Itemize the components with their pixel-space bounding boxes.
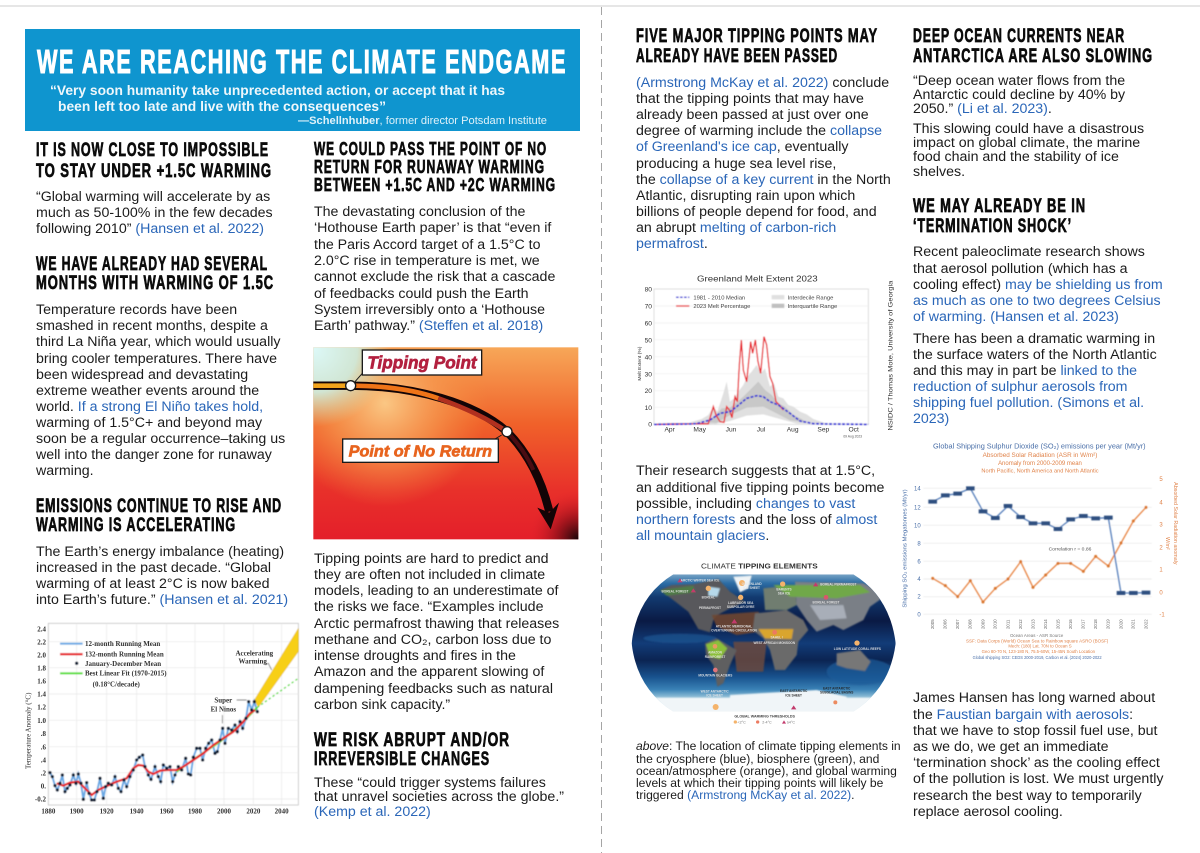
heading: WARMING IS ACCELERATING (36, 515, 236, 536)
heading: WE MAY ALREADY BE IN (913, 196, 1086, 217)
text block: of warming. (Hansen et al. 2023) (913, 309, 1119, 325)
title: WE ARE REACHING THE CLIMATE ENDGAME (37, 43, 567, 80)
x axis labels: 1940 (130, 807, 144, 815)
quote (50, 83, 505, 115)
right axis labels (1159, 477, 1165, 618)
y axis labels: 1.0 (37, 717, 47, 725)
text block: further tipping points: Their research suggests that at 1.5°C, (636, 463, 875, 479)
heading (636, 26, 878, 67)
text block: reduction of sulphur aerosols from (913, 379, 1128, 395)
text block: that the tipping points that may have (636, 91, 864, 107)
y axis labels: 1.8 (37, 664, 47, 672)
map markers (677, 578, 860, 710)
text block: 2.0°C rise in temperature is met, we (314, 253, 540, 269)
x axis labels: Apr (664, 427, 676, 434)
y axis labels: 60 (645, 320, 652, 327)
text block (314, 775, 564, 820)
text block: tipping points hard to predict: Tipping points are hard to predict and (314, 551, 549, 567)
legend: 1981 - 2010 Median (693, 295, 745, 301)
year labels: 2013 (1030, 619, 1035, 629)
text block: Faustian bargain: ‘termination shock’ as the cooling effect (913, 755, 1160, 771)
text block: billions of people depend for food, and (636, 204, 877, 220)
heading (36, 496, 282, 536)
chart title (933, 442, 1146, 474)
quote: been left too late and live with the consequences” (58, 99, 386, 115)
legend: (0.18°C/decade) (93, 681, 141, 689)
left axis labels (914, 486, 921, 618)
label: tipping point: Tipping Point (367, 353, 478, 373)
map labels: BARENTS (776, 587, 792, 591)
text block: tipping points hard to predict: the risks we face. “Examples include (314, 599, 544, 615)
correlation note: Correlation r = 0.86 (1049, 547, 1092, 553)
map labels: SAHEL / (770, 636, 783, 640)
left axis labels: 4 (917, 577, 921, 583)
chart: temperature anomaly line chart (25, 623, 298, 815)
legend: January-December Mean (85, 660, 161, 668)
chart: climate tipping elements map (630, 562, 897, 724)
x axis labels (41, 807, 289, 815)
panel: deep ocean currents (913, 26, 1153, 180)
y axis labels: 2.0 (37, 651, 47, 659)
text block: well into the danger zone for runaway (35, 447, 273, 463)
chart date stamp: 09 Aug 2023 (843, 434, 862, 438)
left axis labels: 6 (917, 559, 921, 565)
text block (913, 73, 1144, 180)
left axis labels: 0 (917, 612, 921, 618)
chart sources (966, 633, 1109, 660)
map labels: OVERTURNING CIRCULATION (711, 629, 758, 633)
legend: Interdecile Range (788, 295, 833, 301)
heading: IRREVERSIBLE CHANGES (314, 749, 490, 770)
panel: title banner (25, 29, 580, 131)
map labels: GREENLAND (742, 582, 762, 586)
chart sources: Geo 80-70 N, 123-180 N, 75.5-60W, 15-45N South Location (982, 649, 1095, 654)
legend: Interquartile Range (788, 304, 837, 310)
quote attribution: —Schellnhuber, former director Potsdam Institute (298, 115, 547, 127)
right axis title: W/m² (1164, 537, 1170, 550)
heading: TO STAY UNDER +1.5C WARMING (36, 161, 272, 182)
panel: abrupt changes (314, 730, 564, 820)
text block (35, 544, 288, 608)
year labels: 2021 (1131, 619, 1136, 629)
y axis labels: 80 (645, 287, 652, 294)
x axis labels: 2040 (275, 807, 289, 815)
chart sources: Global shipping SO2: CEDS 2000-2019, Carbon et al. (2024) 2020-2022 (973, 655, 1102, 660)
text block: There has been a dramatic warming in (913, 331, 1155, 347)
legend: 12-month Running Mean (85, 640, 160, 648)
right axis title (1164, 482, 1178, 565)
x axis labels: 1960 (160, 807, 174, 815)
x axis labels: May (693, 427, 707, 434)
year labels: 2016 (1068, 619, 1073, 629)
year labels: 2006 (943, 619, 948, 629)
y axis labels (35, 626, 47, 804)
text block: 2050.” (Li et al. 2023). (913, 101, 1052, 117)
left axis labels: 12 (914, 505, 921, 511)
year labels (930, 619, 1148, 629)
heading (913, 26, 1153, 67)
chart: tipping point diagram (313, 347, 578, 539)
text block: (Kemp et al. 2022) (314, 804, 431, 820)
text block: producing a huge sea level rise, (636, 156, 836, 172)
panel: emissions continue to rise (35, 496, 288, 608)
y axis labels: 70 (645, 303, 652, 310)
text block: smashed in recent months, despite a (36, 318, 268, 334)
text block: This slowing could have a disastrous (913, 121, 1144, 137)
text block: ‘Hothouse Earth paper’ is that “even if (314, 220, 551, 236)
y axis labels: 1.4 (37, 691, 47, 699)
text block: map caption: above: The location of climate tipping elements in (636, 739, 901, 753)
x axis labels: Jul (757, 427, 766, 434)
year labels: 2011 (1005, 619, 1010, 629)
text block: tipping points hard to predict: carbon sink capacity.” (314, 697, 450, 713)
left axis labels: 14 (914, 486, 921, 492)
chart annotations: Super (214, 697, 232, 705)
x axis labels: 1920 (100, 807, 114, 815)
text block: that unravel societies across the globe.” (314, 789, 564, 805)
text block: “Global warming will accelerate by as (36, 189, 270, 205)
x axis labels: 1880 (41, 807, 56, 815)
x axis labels: Aug (787, 427, 799, 434)
text block: world. If a strong El Niño takes hold, (35, 399, 263, 415)
year labels: 2017 (1081, 619, 1086, 629)
text block: bring cooler temperatures. There have (36, 351, 277, 367)
text block: the collapse of a key current in the North (636, 172, 891, 188)
y axis labels: 20 (645, 388, 652, 395)
left axis labels: 8 (917, 541, 921, 547)
map labels: ARCTIC WINTER SEA ICE (681, 579, 719, 583)
year labels: 2012 (1018, 619, 1023, 629)
text block: Faustian bargain (913, 690, 1164, 820)
y axis labels (645, 287, 652, 429)
map legend: ≥4°C (787, 720, 795, 724)
text block: map caption (636, 739, 901, 802)
map labels: WEST AFRICAN MONSOON (754, 641, 796, 645)
heading (314, 730, 510, 770)
x axis labels: Jun (726, 427, 737, 434)
heading (314, 139, 556, 195)
chart title: Greenland Melt Extent 2023 (697, 274, 818, 284)
x axis labels: 1980 (188, 807, 202, 815)
map legend: GLOBAL WARMING THRESHOLDS (734, 715, 796, 719)
map labels: BOREAL PERMAFROST (820, 582, 857, 586)
text block: The Earth’s energy imbalance (heating) (36, 544, 284, 560)
y axis labels: 10 (645, 405, 652, 412)
heading (36, 254, 274, 294)
map labels (662, 579, 881, 698)
left axis labels: 10 (914, 523, 921, 529)
map labels: LOW LATITUDE CORAL REEFS (834, 647, 881, 651)
x axis labels (664, 427, 859, 434)
arrow: runaway curve (313, 373, 559, 529)
y axis labels: .8 (41, 730, 46, 738)
text block: Recent paleoclimate research shows (913, 244, 1145, 260)
text block: of Greenland's ice cap, eventually (636, 139, 849, 155)
chart title: Global Shipping Sulphur Dioxide (SO₂) emissions per year (Mt/yr) (933, 442, 1146, 451)
y axis labels: 0 (648, 422, 652, 429)
text block: map caption: triggered (Armstrong McKay et al. 2022). (636, 788, 854, 802)
heading: IT IS NOW CLOSE TO IMPOSSIBLE (36, 140, 269, 161)
year labels: 2019 (1106, 619, 1111, 629)
text block: cooling effect) may be shielding us from (913, 277, 1163, 293)
text block: warming of at least 2°C is now baked (35, 576, 270, 592)
quote: “Very soon humanity take unprecedented action, or accept that it has (50, 83, 505, 99)
text block (35, 302, 285, 479)
year labels: 2007 (955, 619, 960, 629)
text block: tipping points hard to predict: Arctic permafrost thawing that releases (314, 616, 559, 632)
text block: already been passed at just over one (636, 107, 869, 123)
text block: increased in the past decade. “Global (36, 560, 271, 576)
y axis labels: .6 (41, 743, 46, 751)
chart title: North Pacific, North America and North Atlantic (981, 468, 1099, 474)
right axis labels: 2 (1159, 545, 1163, 551)
text block: tipping points hard to predict: models, leading to an underestimate of (314, 583, 559, 599)
legend: 2023 Melt Percentage (693, 304, 750, 310)
text block: map caption: ocean/atmosphere (orange), and global warming (636, 764, 897, 778)
heading: FIVE MAJOR TIPPING POINTS MAY (636, 26, 878, 47)
map labels: MOUNTAIN GLACIERS (698, 673, 732, 677)
right axis labels: 0 (1159, 590, 1163, 596)
left axis title: Shipping SO₂ emissions Megatonnes (Mt/yr) (903, 489, 909, 608)
left axis labels: 2 (917, 595, 921, 601)
text block: impact on global climate, the marine (913, 135, 1140, 151)
x axis labels: 2000 (217, 807, 231, 815)
text block: 2023) (913, 411, 949, 427)
text block (36, 189, 273, 237)
heading: RETURN FOR RUNAWAY WARMING (314, 157, 545, 177)
text block: Faustian bargain: research the best way to temporarily (913, 788, 1143, 804)
year labels: 2020 (1118, 619, 1123, 629)
text block: soon be a regular occurrence–taking us (36, 431, 285, 447)
year labels: 2010 (993, 619, 998, 629)
map labels: EAST ANTARCTIC (823, 686, 851, 690)
heading: WE COULD PASS THE POINT OF NO (314, 139, 547, 159)
text block: Faustian bargain: James Hansen has long warned about (913, 690, 1155, 706)
right axis title: Absorbed Solar Radiation anomaly (1172, 482, 1178, 565)
right axis labels: -1 (1159, 612, 1165, 618)
x axis labels: Oct (848, 427, 859, 434)
y axis labels: 30 (645, 371, 652, 378)
map labels: SUBGLACIAL BASINS (820, 691, 853, 695)
x axis labels: Sep (817, 427, 830, 434)
year labels: 2015 (1055, 619, 1060, 629)
panel: months at 1.5C (35, 254, 285, 479)
map labels: WEST ANTARCTIC (701, 689, 729, 693)
text block: further tipping points (636, 463, 885, 544)
y axis labels: 1.6 (37, 678, 47, 686)
chart annotations: Accelerating (236, 649, 274, 657)
map labels: ICE SHEET (743, 586, 760, 590)
map labels: BOREAL FOREST (813, 600, 840, 604)
legend (693, 295, 837, 310)
text block: Faustian bargain: the Faustian bargain with aerosols: (913, 707, 1133, 723)
y axis labels: 50 (645, 337, 652, 344)
text block (636, 75, 891, 252)
legend: 132-month Running Mean (85, 651, 164, 659)
text block: tipping points hard to predict: methane and CO₂, carbon loss due to (314, 632, 551, 648)
text block: that aerosol pollution (which has a (913, 261, 1128, 277)
year labels: 2005 (930, 619, 935, 629)
text block: further tipping points: an additional five tipping points become (636, 480, 885, 496)
text block: cannot exclude the risk that a cascade (314, 269, 555, 285)
text block: extreme weather events around the (36, 383, 259, 399)
heading: ALREADY HAVE BEEN PASSED (636, 46, 838, 67)
text block: of feedbacks could push the Earth (314, 286, 529, 302)
chart annotations: Warming (239, 658, 267, 666)
right axis labels: 4 (1159, 500, 1163, 506)
right axis labels: 5 (1159, 477, 1163, 483)
text block: The devastating conclusion of the (314, 204, 525, 220)
text block: the Paris Accord target of a 1.5°C to (314, 237, 541, 253)
heading (36, 140, 272, 182)
text block: These “could trigger systems failures (314, 775, 546, 791)
text block: shelves. (913, 164, 965, 180)
text block: “Deep ocean water flows from the (913, 73, 1125, 89)
year labels: 2018 (1093, 619, 1098, 629)
text block: (Armstrong McKay et al. 2022) conclude (636, 75, 889, 91)
text block: System irreversibly onto a ‘Hothouse (314, 302, 545, 318)
panel: five major tipping points (636, 26, 891, 252)
heading: WE RISK ABRUPT AND/OR (314, 730, 510, 751)
legend (85, 640, 167, 689)
y axis labels: .2 (41, 769, 46, 777)
text block: Faustian bargain: as we do, we get an immediate (913, 739, 1109, 755)
text block: Faustian bargain: replace aerosol cooling. (913, 804, 1063, 820)
text block: Faustian bargain: of the pollution is lost. We must urgently (913, 771, 1164, 787)
heading (913, 196, 1086, 237)
text block: degree of warming include the collapse (636, 123, 882, 139)
year labels: 2022 (1143, 619, 1148, 629)
text block: into Earth’s future.” (Hansen et al. 2021) (36, 592, 288, 608)
chart sources: SSF: Data Corps (World) Ocean Sea to Rainbow square ASRO (BOSF) (966, 639, 1109, 644)
map title: CLIMATE TIPPING ELEMENTS (701, 562, 818, 571)
y axis labels: -0.2 (35, 796, 47, 804)
text block: map caption: levels at which their tipping points will likely be (636, 776, 884, 790)
legend: Best Linear Fit (1970-2015) (85, 670, 167, 678)
map legend (734, 715, 796, 724)
chart annotations (211, 649, 274, 714)
map labels: BOREAL (702, 595, 715, 599)
chart: Greenland melt extent (637, 274, 895, 438)
text block: as much as one to two degrees Celsius (913, 293, 1161, 309)
chart title: Absorbed Solar Radiation (ASR in W/m²) (983, 452, 1097, 459)
text block (314, 204, 555, 334)
y axis title: Melt Extent (%) (637, 346, 643, 381)
chart sources: Ocean Areas - ASR Source (1010, 633, 1064, 638)
map labels: BOREAL FOREST (662, 589, 689, 593)
heading: ‘TERMINATION SHOCK’ (913, 216, 1072, 237)
text block: Faustian bargain: that we have to stop fossil fuel use, but (913, 723, 1158, 739)
source credit: NSIDC / Thomas Mote, University of Georgia (888, 280, 895, 431)
map legend: <2°C (738, 720, 746, 724)
text block: further tipping points: possible, including changes to vast (636, 496, 855, 512)
heading: BETWEEN +1.5C AND +2C WARMING (314, 175, 556, 195)
heading: MONTHS WITH WARMING OF 1.5C (36, 273, 274, 294)
text block (913, 244, 1163, 427)
map legend: 2-4°C (762, 720, 772, 724)
chart annotations: El Ninos (211, 706, 236, 714)
x axis labels: 2020 (246, 807, 261, 815)
heading: EMISSIONS CONTINUE TO RISE AND (36, 496, 282, 517)
y axis title: Temperature Anomaly (°C) (25, 692, 33, 769)
text block: map caption: the cryosphere (blue), biosphere (green), and (636, 752, 879, 766)
map labels: SUBPOLAR GYRE (727, 605, 754, 609)
text block: following 2010” (Hansen et al. 2022) (36, 221, 264, 237)
right axis labels: 3 (1159, 523, 1163, 529)
text block: food chain and the stability of ice (913, 149, 1119, 165)
text block: tipping points hard to predict: intense droughts and fires in the (314, 648, 516, 664)
text block: tipping points hard to predict: Amazon and the apparent slowing of (314, 664, 544, 680)
map labels: ICE SHEET (706, 694, 723, 698)
chart: shipping sulphur dioxide and solar radiation (903, 442, 1178, 660)
map labels: SEA ICE (778, 591, 790, 595)
text block: Temperature records have been (36, 302, 237, 318)
text block: Earth’ pathway.” (Steffen et al. 2018) (314, 318, 543, 334)
text block: and this may in part be linked to the (913, 363, 1137, 379)
text block: further tipping points: all mountain glaciers. (636, 528, 769, 544)
text block: further tipping points: northern forests and the loss of almost (636, 512, 877, 528)
label: point of no return (343, 439, 498, 462)
x axis labels: 1900 (70, 807, 84, 815)
y axis labels: .4 (41, 756, 46, 764)
map labels: ICE SHEET (785, 693, 802, 697)
text block: tipping points hard to predict: they are often not included in climate (314, 567, 545, 583)
year labels: 2008 (968, 619, 973, 629)
map labels: AMAZON (708, 651, 723, 655)
map labels: RAINFOREST (705, 655, 725, 659)
y axis labels: 0. (41, 783, 46, 791)
text block: the surface waters of the North Atlantic (913, 347, 1157, 363)
panel: close to impossible (36, 140, 273, 237)
map labels: LABRADOR SEA (728, 601, 754, 605)
text block: tipping points hard to predict (314, 551, 559, 713)
text block: warming of 1.5°C+ and beyond may (35, 415, 263, 431)
text block: been widespread and devastating (36, 367, 248, 383)
right axis labels: 1 (1159, 568, 1163, 574)
panel: termination shock (913, 196, 1163, 427)
text block: an abrupt melting of carbon-rich (636, 220, 836, 236)
text block: much as 50-100% in the few decades (36, 205, 273, 221)
y axis labels: 2.2 (37, 638, 47, 646)
y axis labels: 1.2 (37, 704, 47, 712)
text block: third La Niña year, which would usually (36, 334, 281, 350)
text block: Antarctic could decline by 40% by (913, 87, 1126, 103)
heading: WE HAVE ALREADY HAD SEVERAL (36, 254, 268, 275)
text block: warming. (35, 463, 94, 479)
map labels: PERMAFROST (699, 606, 721, 610)
text block: tipping points hard to predict: dampening feedbacks such as natural (314, 681, 553, 697)
y axis labels: 40 (645, 354, 652, 361)
year labels: 2009 (980, 619, 985, 629)
map labels: ATLANTIC MERIDIONAL (716, 624, 752, 628)
y axis labels: 2.4 (37, 626, 47, 634)
chart title: Anomaly from 2000-2009 mean (998, 461, 1082, 467)
text block: Atlantic, disrupting rain upon which (636, 188, 855, 204)
text block: permafrost. (636, 236, 708, 252)
text block: shipping fuel pollution. (Simons et al. (913, 395, 1144, 411)
map labels: EAST ANTARCTIC (780, 689, 808, 693)
label: point of no return: Point of No Return (349, 443, 492, 460)
panel: point of no return (314, 139, 556, 334)
year labels: 2014 (1043, 619, 1048, 629)
chart sources: Mech: (180) Lat. 70N to Ocean S (1008, 644, 1072, 649)
